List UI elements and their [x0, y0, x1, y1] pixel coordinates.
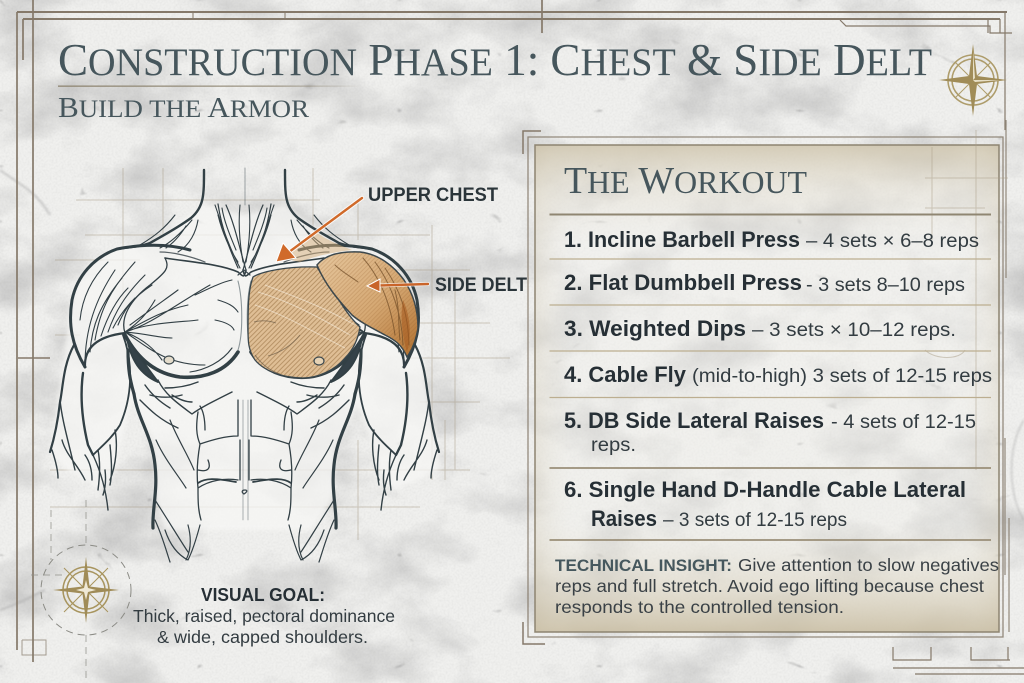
visual goal caption: VISUAL GOAL:: [201, 584, 325, 605]
figure: centre line: [238, 168, 250, 520]
exercise 5: [564, 408, 976, 456]
exercise 6: 6. Single Hand D-Handle Cable Lateral: [564, 477, 966, 502]
exercise 2: [564, 270, 965, 296]
trap fibers: [140, 215, 198, 252]
exercise 1: – 4 sets × 6–8 reps: [806, 230, 979, 252]
row dividers: [550, 214, 991, 540]
icon: compass top right: [939, 44, 1007, 116]
arrow: side delt: [367, 279, 428, 292]
figure: left nipple: [164, 356, 174, 364]
exercise 4: [564, 362, 992, 387]
panel: the workout: [523, 130, 1008, 644]
figure: symmetrical linework: [50, 170, 246, 562]
serratus and abs: [140, 380, 232, 428]
heading: the workout: THE WORKOUT: [564, 160, 807, 202]
pec fibers: [125, 280, 238, 372]
title: CONSTRUCTION PHASE 1: CHEST & SIDE DELT: [58, 34, 932, 85]
technical insight: [555, 555, 999, 617]
label: upper chest: UPPER CHEST: [368, 185, 498, 206]
exercise 3: – 3 sets × 10–12 reps.: [752, 319, 956, 341]
exercise 6: Raises: [591, 506, 657, 531]
panel parchment: [535, 145, 999, 632]
exercise 6: – 3 sets of 12-15 reps: [663, 509, 847, 531]
technical insight: Give attention to slow negatives: [738, 555, 999, 575]
icon: compass bottom left: [31, 500, 131, 683]
anatomy figure: [50, 168, 440, 562]
visual goal caption: [133, 584, 395, 647]
arrow: upper chest: [276, 198, 362, 262]
highlight: upper chest pectoral: [248, 267, 360, 378]
figure: mirrored linework: [243, 170, 439, 562]
exercise 2: 2. Flat Dumbbell Press: [564, 270, 802, 295]
visual goal caption: Thick, raised, pectoral dominance: [133, 606, 395, 626]
exercise 6: [564, 477, 966, 531]
panel drafting marks: [925, 130, 1008, 470]
panel frame: [523, 131, 1003, 644]
label: side delt: SIDE DELT: [435, 275, 527, 296]
highlight: side delt: [317, 252, 418, 357]
exercise 1: [564, 227, 979, 252]
technical insight: responds to the controlled tension.: [555, 597, 844, 617]
technical insight: TECHNICAL INSIGHT:: [555, 556, 732, 575]
figure: white silhouette: [50, 205, 440, 530]
exercise 5: 5. DB Side Lateral Raises: [564, 408, 824, 433]
subtitle: BUILD THE ARMOR: [58, 92, 309, 124]
blueprint grid behind figure: [50, 168, 510, 540]
exercise 3: 3. Weighted Dips: [564, 316, 746, 341]
exercise 2: - 3 sets 8–10 reps: [806, 274, 965, 296]
exercise 3: [564, 316, 956, 341]
exercise 5: - 4 sets of 12-15: [831, 411, 976, 433]
exercise 5: reps.: [591, 434, 636, 456]
technical insight: reps and full stretch. Avoid ego lifting because chest: [555, 576, 984, 596]
title divider: [58, 86, 363, 87]
forearm tufts: [52, 400, 116, 510]
highlight: upper trap tint: [282, 232, 352, 262]
exercise 4: 4. Cable Fly: [564, 362, 687, 387]
delt fibers: [80, 262, 152, 365]
exercise 1: 1. Incline Barbell Press: [564, 227, 800, 252]
visual goal caption: & wide, capped shoulders.: [157, 627, 368, 647]
exercise 4: (mid-to-high) 3 sets of 12-15 reps: [692, 365, 992, 387]
